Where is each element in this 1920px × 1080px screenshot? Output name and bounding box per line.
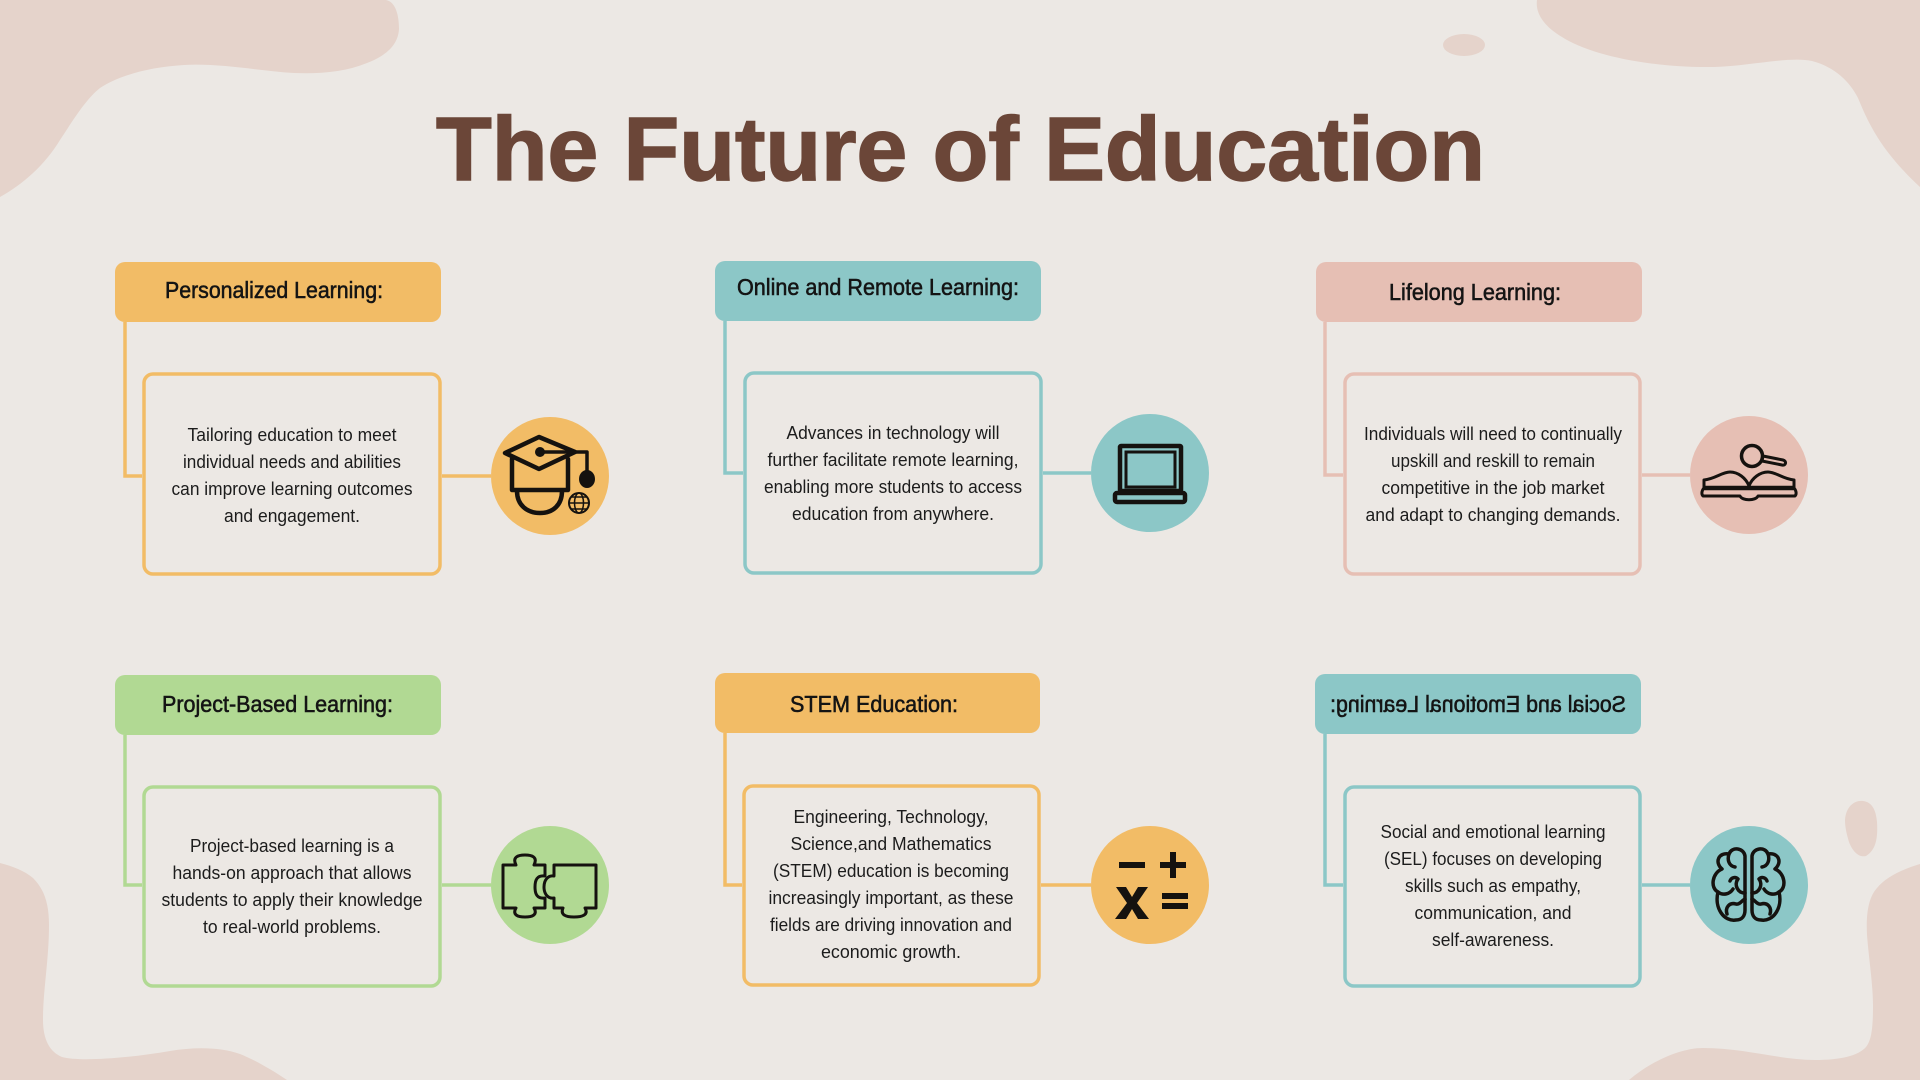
text box (144, 374, 440, 574)
background blob: top right (1537, 0, 1920, 187)
connector lines (725, 733, 1091, 885)
body text: enabling more students to access (764, 476, 1022, 497)
title: The Future of Education (436, 100, 1485, 200)
text box (1345, 787, 1640, 986)
heading bar (1315, 674, 1641, 734)
connector lines (1325, 734, 1690, 885)
connector lines (125, 322, 491, 476)
text box (1345, 374, 1640, 574)
icon: puzzle pieces (503, 855, 596, 917)
body text: (SEL) focuses on developing (1384, 848, 1602, 869)
heading: Personalized Learning: (165, 277, 383, 303)
body text (162, 835, 422, 937)
icon circle (1690, 826, 1808, 944)
body text (1380, 821, 1606, 950)
icon: brain (1713, 849, 1784, 920)
panel: online and remote learning (715, 261, 1209, 573)
icon circle (491, 417, 609, 535)
heading bar (1316, 262, 1642, 322)
body text (172, 424, 412, 526)
panel: STEM education (715, 673, 1209, 985)
body text: (STEM) education is becoming (773, 860, 1009, 881)
body text: economic growth. (821, 941, 961, 962)
body text: Social and emotional learning (1380, 821, 1606, 842)
body text: self-awareness. (1432, 929, 1554, 950)
body text: Project-based learning is a (190, 835, 395, 856)
body text: further facilitate remote learning, (768, 449, 1018, 470)
body text: communication, and (1414, 902, 1572, 923)
icon: graduation cap (505, 437, 595, 513)
icon: math symbols (1115, 852, 1188, 919)
body text: hands-on approach that allows (172, 862, 412, 883)
body text (764, 422, 1022, 524)
heading bar (115, 675, 441, 735)
heading: Online and Remote Learning: (737, 274, 1019, 300)
text box (144, 787, 440, 986)
panel: lifelong learning (1316, 262, 1808, 574)
body text: upskill and reskill to remain (1391, 450, 1595, 471)
connector lines (725, 321, 1091, 473)
icon circle (491, 826, 609, 944)
body text: education from anywhere. (792, 503, 994, 524)
body text: and engagement. (224, 505, 360, 526)
body text: competitive in the job market (1382, 477, 1604, 498)
connector lines (125, 735, 491, 885)
body text (1364, 423, 1623, 525)
panel: social and emotional learning (1315, 674, 1808, 986)
body text: increasingly important, as these (768, 887, 1014, 908)
text box (744, 786, 1039, 985)
background blob: small top (1443, 34, 1485, 56)
background blob: bottom left (0, 863, 287, 1080)
body text: skills such as empathy, (1405, 875, 1581, 896)
body text: Advances in technology will (786, 422, 1000, 443)
icon: book with magnifier (1702, 446, 1796, 500)
body text: individual needs and abilities (183, 451, 401, 472)
panel: project-based learning (115, 675, 609, 986)
heading bar (715, 261, 1041, 321)
background blob: small right (1845, 801, 1877, 856)
body text: fields are driving innovation and (770, 914, 1012, 935)
heading: Lifelong Learning: (1389, 279, 1561, 305)
background blob: bottom right (1629, 864, 1920, 1080)
icon: laptop (1115, 446, 1185, 502)
heading: STEM Education: (790, 691, 958, 717)
body text (768, 806, 1014, 962)
background blob: top left (0, 0, 399, 197)
text box (745, 373, 1041, 573)
heading bar (715, 673, 1040, 733)
body text: Tailoring education to meet (188, 424, 396, 445)
body text: Engineering, Technology, (794, 806, 988, 827)
body text: students to apply their knowledge (162, 889, 422, 910)
body text: and adapt to changing demands. (1366, 504, 1620, 525)
heading (mirrored): Social and Emotional Learning: (1330, 691, 1626, 717)
panel: personalized learning (115, 262, 609, 574)
icon circle (1690, 416, 1808, 534)
body text: Individuals will need to continually (1364, 423, 1623, 444)
heading: Project-Based Learning: (162, 691, 393, 717)
body text: to real-world problems. (203, 916, 381, 937)
body text: can improve learning outcomes (172, 478, 412, 499)
body text: Science,and Mathematics (790, 833, 992, 854)
icon circle (1091, 414, 1209, 532)
heading bar (115, 262, 441, 322)
icon circle (1091, 826, 1209, 944)
connector lines (1325, 322, 1690, 475)
